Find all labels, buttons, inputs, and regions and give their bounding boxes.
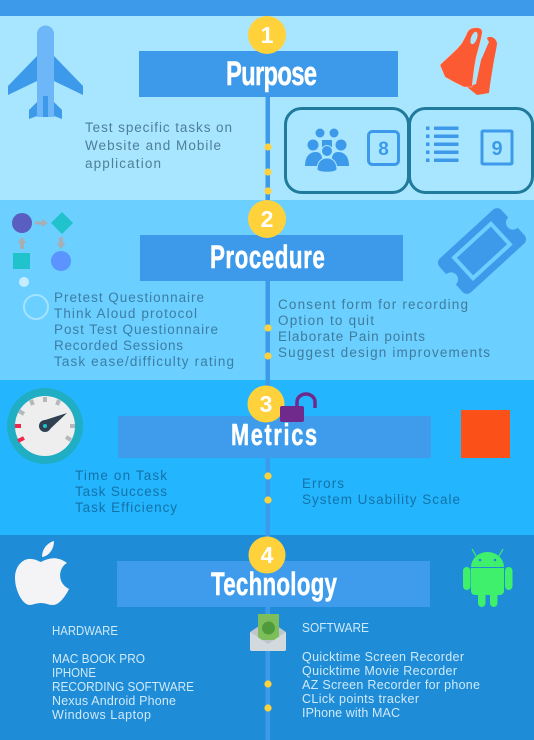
text: hardware list: HARDWARE <box>52 624 118 638</box>
heading: Procedure <box>140 235 403 281</box>
text: procedure left list <box>54 290 234 369</box>
text: procedure right list <box>278 297 490 360</box>
panel: purpose <box>0 16 534 200</box>
text: procedure left list: Think Aloud protocol <box>54 306 197 321</box>
number badge 2: 2 <box>261 206 273 232</box>
text: purpose description: Test specific tasks on <box>85 120 232 135</box>
heading: Technology <box>117 561 430 607</box>
icon: list <box>426 126 458 162</box>
text: metrics left list <box>75 468 177 515</box>
heading: Metrics <box>118 416 431 458</box>
heading: Purpose: Purpose <box>226 55 317 93</box>
text: procedure right list: Suggest design improvements <box>278 345 490 360</box>
text: software list: Quicktime Screen Recorder <box>302 650 464 664</box>
icon: airplane <box>8 26 83 119</box>
heading: Procedure: Procedure <box>210 239 325 275</box>
number box 9: 9 <box>491 138 503 160</box>
heading: Technology: Technology <box>211 566 338 602</box>
text: software list: CLick points tracker <box>302 692 419 706</box>
icon: swim fins <box>440 28 497 95</box>
text: software list: IPhone with MAC <box>302 706 400 720</box>
panel: procedure <box>0 200 534 380</box>
text: software list: AZ Screen Recorder for phone <box>302 678 480 692</box>
icon: speedometer <box>7 388 83 464</box>
number badge 2 <box>248 200 286 238</box>
text: purpose description: application <box>85 156 161 171</box>
text: hardware list: Nexus Android Phone <box>52 694 176 708</box>
text: hardware list: Windows Laptop <box>52 708 151 722</box>
text: software list: SOFTWARE <box>302 621 369 635</box>
text: metrics left list: Time on Task <box>75 468 167 483</box>
icon: envelope with money <box>250 614 286 651</box>
card: participants 8 <box>286 108 408 192</box>
icon: android robot <box>463 549 512 607</box>
card: tasks 9 <box>410 108 532 192</box>
text: metrics right list: Errors <box>302 476 344 491</box>
text: purpose description: Website and Mobile <box>85 138 221 153</box>
text: metrics right list: System Usability Scale <box>302 492 460 507</box>
text: hardware list: IPHONE <box>52 666 96 680</box>
number badge 3 <box>248 386 284 422</box>
panel: metrics <box>0 380 534 535</box>
number box 8: 8 <box>378 139 389 160</box>
text: procedure left list: Task ease/difficulty rating <box>54 354 234 369</box>
icon: ticket <box>430 201 534 301</box>
heading: Metrics: Metrics <box>231 417 317 452</box>
text: procedure right list: Elaborate Pain points <box>278 329 425 344</box>
icon: red square <box>461 410 510 458</box>
icon: people group <box>305 128 349 172</box>
text: procedure left list: Pretest Questionnaire <box>54 290 204 305</box>
text: metrics left list: Task Success <box>75 484 167 499</box>
text: hardware list <box>52 624 194 722</box>
text: metrics left list: Task Efficiency <box>75 500 177 515</box>
text: procedure left list: Recorded Sessions <box>54 338 183 353</box>
text: hardware list: MAC BOOK PRO <box>52 652 145 666</box>
number badge 1: 1 <box>261 22 274 48</box>
icon: flow diagram <box>12 212 73 319</box>
text: procedure right list: Option to quit <box>278 313 374 328</box>
number badge 4: 4 <box>261 542 274 568</box>
text: software list: Quicktime Movie Recorder <box>302 664 457 678</box>
number badge 1 <box>248 16 286 54</box>
text: procedure right list: Consent form for recording <box>278 297 468 312</box>
timeline dots <box>264 143 272 712</box>
text: procedure left list: Post Test Questionnaire <box>54 322 218 337</box>
heading: Purpose <box>139 51 398 97</box>
text: metrics right list <box>302 476 460 507</box>
text: software list <box>302 621 480 720</box>
panel: technology <box>0 535 534 740</box>
number badge 3: 3 <box>260 391 272 417</box>
number badge 4 <box>248 536 286 574</box>
icon: apple logo <box>15 541 69 605</box>
text: hardware list: RECORDING SOFTWARE <box>52 680 194 694</box>
icon: open lock <box>280 394 315 422</box>
timeline line <box>266 90 270 740</box>
text: purpose description <box>85 120 232 171</box>
